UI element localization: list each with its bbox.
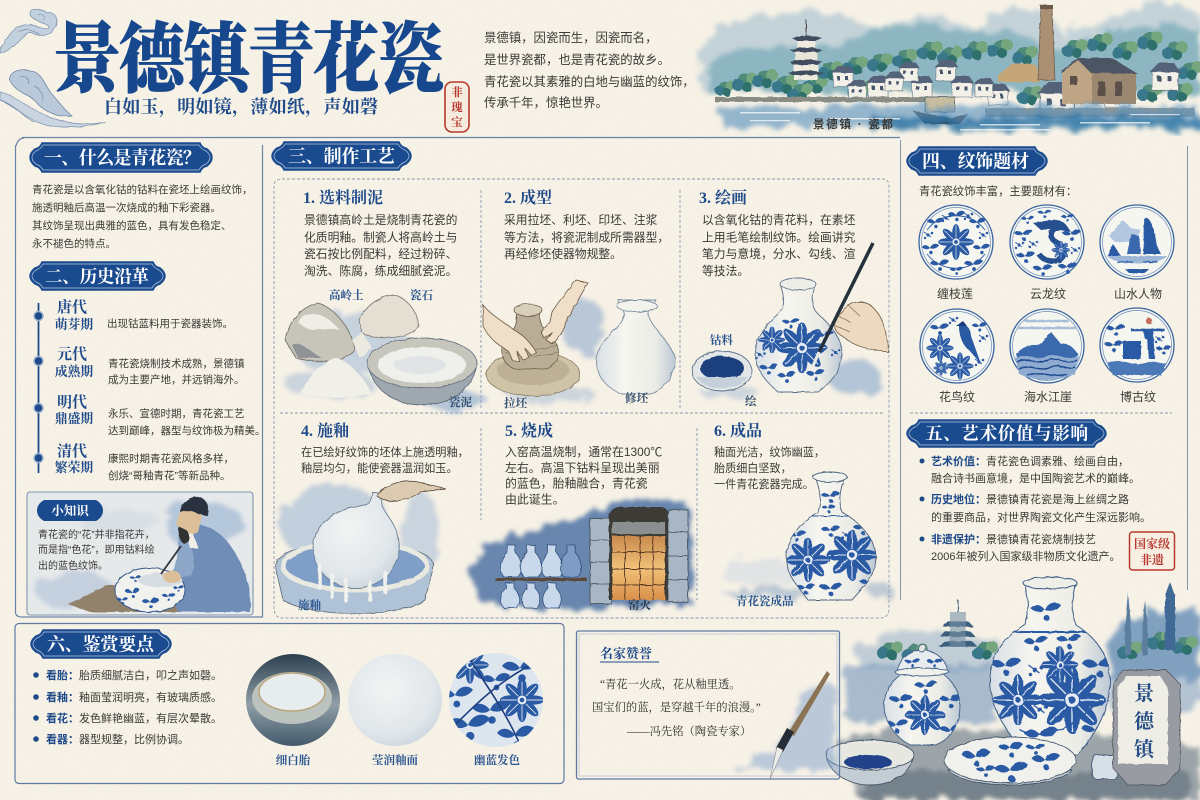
step 1 choose materials: 淘洗、陈腐，练成细腻瓷泥。 [304, 264, 457, 278]
timeline: dynasties: 成为主要产地，并远销海外。 [108, 373, 244, 386]
bullets: art value: 历史地位：景德镇青花瓷是海上丝绸之路 [931, 492, 1129, 506]
photo captions: 细白胎 [276, 753, 312, 767]
step 1 choose materials: 景德镇高岭土是烧制青花瓷的 [304, 213, 457, 227]
step 2 forming: 再经修坯使器物规整。 [504, 247, 622, 261]
motif captions [937, 286, 1162, 404]
motif captions: 缠枝莲 [937, 286, 973, 301]
timeline: dynasties: 永乐、宣德时期，青花瓷工艺 [108, 407, 244, 420]
bullets: art value: 2006年被列入国家级非物质文化遗产。 [931, 549, 1120, 563]
timeline: dynasties: 创烧“哥釉青花”等新品种。 [108, 469, 230, 482]
step 4 glazing: 釉层均匀，能使瓷器温润如玉。 [301, 461, 458, 475]
panel: fun fact with painter illustration: 出的蓝色纹饰。 [38, 559, 108, 572]
illustration: Jingdezhen town landscape [700, 1, 1200, 131]
big vase [990, 577, 1116, 755]
step 1 choose materials: 瓷石按比例配料，经过粉碎、 [304, 247, 457, 261]
step 3 painting: 等技法。 [702, 264, 749, 278]
seal: 非遗瑰宝: 宝 [451, 116, 463, 129]
panel frame: left and top frame [16, 138, 900, 617]
heading: 一、什么是青花瓷 [30, 143, 212, 172]
heading: 五、艺术价值与影响: 五、艺术价值与影响 [925, 424, 1088, 444]
timeline: dynasties: 萌芽期 [55, 317, 93, 332]
pigment bowl [826, 740, 914, 785]
step 5 firing: 由此诞生。 [505, 492, 564, 506]
text: what is blue-and-white porcelain [32, 183, 252, 250]
motif captions: 山水人物 [1114, 287, 1162, 301]
title: 景德镇青花瓷 [54, 19, 444, 103]
small cube [1092, 755, 1118, 779]
panel: fun fact with painter illustration: 青花瓷的“花”并非指花卉， [38, 528, 155, 541]
panel: fun fact with painter illustration: 而是指“色花”，即用钴料绘 [38, 543, 155, 556]
left hand and forearm [483, 305, 536, 361]
illustration: still life with porcelain and lakeside: 德 [1134, 710, 1156, 733]
heading: 四、纹饰题材 [907, 147, 1047, 175]
plate: 山水人物 [1100, 205, 1174, 279]
step 2 forming: 拉坯 [504, 396, 528, 410]
timeline: dynasties: 达到巅峰，器型与纹饰极为精美。 [108, 424, 266, 437]
timeline: dynasties: 出现钴蓝料用于瓷器装饰。 [107, 317, 233, 330]
stone tablet [1113, 670, 1180, 785]
step 5 firing [470, 421, 692, 612]
step 2 forming: 2. 成型 [504, 188, 552, 207]
step 6 finished piece: 釉面光洁，纹饰幽蓝， [714, 445, 825, 459]
plate: 博古纹 [1100, 308, 1174, 382]
seal: 非遗瑰宝 [445, 82, 469, 132]
step 2 forming: 修坯 [625, 391, 649, 405]
panel: famous quote: 名家赞誉 [600, 646, 652, 661]
step 4 glazing: 在已绘好纹饰的坯体上施透明釉， [301, 445, 469, 459]
panel: crafting steps frame [274, 179, 889, 618]
step 3 painting [692, 188, 888, 408]
heading: 六、鉴赏要点: 六、鉴赏要点 [47, 634, 156, 654]
intro text: 是世界瓷都，也是青花瓷的故乡。 [484, 52, 670, 67]
photo captions: 幽蓝发色 [474, 753, 520, 767]
stamp: national heritage [1130, 532, 1174, 570]
timeline: dynasties: 明代 [57, 394, 87, 411]
seal: 非遗瑰宝: 瑰 [451, 100, 463, 114]
icon: swirling clouds [0, 9, 105, 127]
step 3 painting: 以含氧化钴的青花料，在素坯 [702, 213, 856, 227]
bullets: art value: 非遗保护：景德镇青花瓷烧制技艺 [931, 532, 1096, 546]
heading: 二、历史沿革 [30, 262, 165, 290]
photo captions: 莹润釉面 [372, 753, 418, 767]
timeline: dynasties: 青花瓷烧制技术成熟，景德镇 [108, 357, 245, 370]
illustration: still life with porcelain and lakeside: 景 [1134, 682, 1155, 705]
step 6 finished piece: 一件青花瓷器完成。 [714, 477, 814, 491]
motif captions: 云龙纹 [1030, 287, 1066, 301]
panel: appreciation points: 看器：器型规整，比例协调。 [46, 732, 189, 746]
caption: 景德镇·瓷都: 景德镇 · 瓷都 [813, 117, 894, 131]
lidded jar [884, 644, 962, 745]
step 5 firing: 的蓝色，胎釉融合，青花瓷 [505, 476, 648, 490]
text: motif intro: 青花瓷纹饰丰富，主要题材有： [919, 184, 1077, 198]
step 1 choose materials: 瓷石 [410, 288, 433, 302]
step 5 firing: 入窑高温烧制，通常在1300℃ [505, 445, 662, 459]
motif captions: 花鸟纹 [939, 389, 975, 404]
text: what is blue-and-white porcelain: 永不褪色的特点。 [32, 237, 116, 250]
step 1 choose materials: 1. 选料制泥 [303, 188, 383, 207]
step 6 finished piece: 6. 成品 [714, 421, 762, 440]
intro text [484, 30, 695, 110]
plate [944, 737, 1076, 785]
step 1 choose materials: 高岭土 [329, 288, 364, 302]
intro text: 传承千年，惊艳世界。 [484, 95, 608, 110]
timeline: dynasties: 成熟期 [55, 364, 93, 379]
step 5 firing: 5. 烧成 [505, 421, 553, 440]
motif captions: 海水江崖 [1024, 389, 1072, 404]
panel: appreciation points: 看釉：釉面莹润明亮，有玻璃质感。 [46, 690, 222, 704]
step 1 choose materials [285, 188, 487, 410]
panel frame: right column [900, 140, 1188, 600]
step 3 painting: 上用毛笔绘制纹饰。绘画讲究 [702, 230, 856, 244]
heading: 六、鉴赏要点 [31, 630, 171, 658]
seal: 非遗瑰宝: 非 [451, 85, 463, 99]
stamp: national heritage: 国家级 [1134, 536, 1170, 551]
plate: 云龙纹 [1010, 205, 1084, 279]
panel: famous quote [576, 631, 840, 779]
panel: famous quote: ——冯先铭（陶瓷专家） [626, 724, 751, 738]
icon: brush [770, 671, 830, 779]
text: what is blue-and-white porcelain: 青花瓷是以含氧化钴的钴料在瓷坯上绘画纹饰， [32, 183, 252, 196]
step 2 forming [483, 188, 675, 410]
photo: white body foot ring [246, 654, 340, 746]
plate: 花鸟纹 [920, 309, 994, 383]
panel: appreciation points: 看胎：胎质细腻洁白，叩之声如磬。 [46, 668, 222, 682]
heading: 五、艺术价值与影响 [907, 420, 1106, 447]
bullets: art value: 的重要商品，对世界陶瓷文化产生深远影响。 [931, 510, 1151, 524]
timeline: dynasties: 鼎盛期 [55, 411, 93, 426]
step 5 firing: 窑火 [628, 598, 651, 612]
step 6 finished piece [714, 421, 892, 608]
step 6 finished piece: 胎质细白坚致， [714, 461, 792, 475]
step 4 glazing: 施釉 [298, 598, 321, 612]
timeline: dynasties: 清代 [57, 442, 87, 460]
photo captions [276, 753, 520, 767]
timeline: dynasties: 唐代 [57, 298, 87, 316]
subtitle: 白如玉，明如镜，薄如纸，声如磬 [104, 96, 378, 118]
step 5 firing: 左右。高温下钴料呈现出美丽 [505, 461, 660, 475]
heading: 三、制作工艺: 三、制作工艺 [288, 146, 395, 166]
heading: 二、历史沿革: 二、历史沿革 [45, 266, 149, 286]
timeline: dynasties: 康熙时期青花瓷风格多样， [108, 452, 234, 465]
step 3 painting: 钴料 [710, 333, 733, 347]
bullets: art value: 艺术价值：青花瓷色调素雅、绘画自由， [931, 454, 1129, 468]
text: what is blue-and-white porcelain: 施透明釉后高温一次烧成的釉下彩瓷器。 [32, 201, 221, 214]
illustration: still life with porcelain and lakeside: 镇 [1134, 738, 1157, 761]
motif captions: 博古纹 [1120, 389, 1156, 404]
timeline: dynasties: 繁荣期 [55, 460, 93, 475]
text: what is blue-and-white porcelain: 其纹饰呈现出典雅的蓝色，具有发色稳定、 [32, 219, 232, 232]
plate: 海水江崖 [1010, 309, 1084, 383]
stamp: national heritage: 非遗 [1140, 552, 1164, 567]
intro text: 青花瓷以其素雅的白地与幽蓝的纹饰， [484, 74, 695, 89]
heading: 四、纹饰题材: 四、纹饰题材 [922, 150, 1029, 172]
step 1 choose materials: 瓷泥 [449, 395, 472, 409]
panel: famous quote: 国宝们的蓝，是穿越千年的浪漫。” [592, 700, 761, 714]
illustration: still life with porcelain and lakeside [826, 577, 1200, 800]
heading: 三、制作工艺 [272, 142, 411, 170]
photo: glossy glaze [348, 654, 442, 746]
panel: appreciation points [15, 624, 564, 784]
bullets: art value [920, 454, 1151, 563]
step 3 painting: 笔力与意境，分水、勾线、渲 [702, 247, 856, 261]
photo: deep blue pattern [449, 653, 543, 747]
step 2 forming: 采用拉坯、利坯、印坯、注浆 [504, 213, 658, 227]
panel: fun fact with painter illustration: 小知识 [51, 503, 90, 518]
step 1 choose materials: 化质明釉。制瓷人将高岭土与 [304, 230, 457, 244]
intro text: 景德镇，因瓷而生，因瓷而名， [484, 30, 657, 45]
bullets: art value: 融合诗书画意境，是中国陶瓷艺术的巅峰。 [931, 471, 1140, 485]
step 3 painting: 3. 绘画 [699, 188, 747, 207]
right hand and forearm [541, 280, 588, 344]
step 3 painting: 绘 [745, 394, 757, 408]
step 4 glazing [275, 422, 469, 614]
timeline: dynasties: 元代 [57, 346, 87, 363]
heading: 一、什么是青花瓷: 一、什么是青花瓷？ [44, 147, 201, 168]
step 4 glazing: 4. 施釉 [301, 422, 349, 440]
panel: appreciation points: 看花：发色鲜艳幽蓝，有层次晕散。 [46, 711, 222, 725]
step 6 finished piece: 青花瓷成品 [736, 594, 794, 608]
plate: 缠枝莲 [919, 205, 993, 279]
panel: fun fact with painter illustration [27, 492, 253, 615]
step 2 forming: 等方法，将瓷泥制成所需器型， [504, 230, 669, 244]
panel: famous quote: “青花一火成，花从釉里透。 [600, 677, 741, 691]
timeline: dynasties [34, 298, 266, 482]
